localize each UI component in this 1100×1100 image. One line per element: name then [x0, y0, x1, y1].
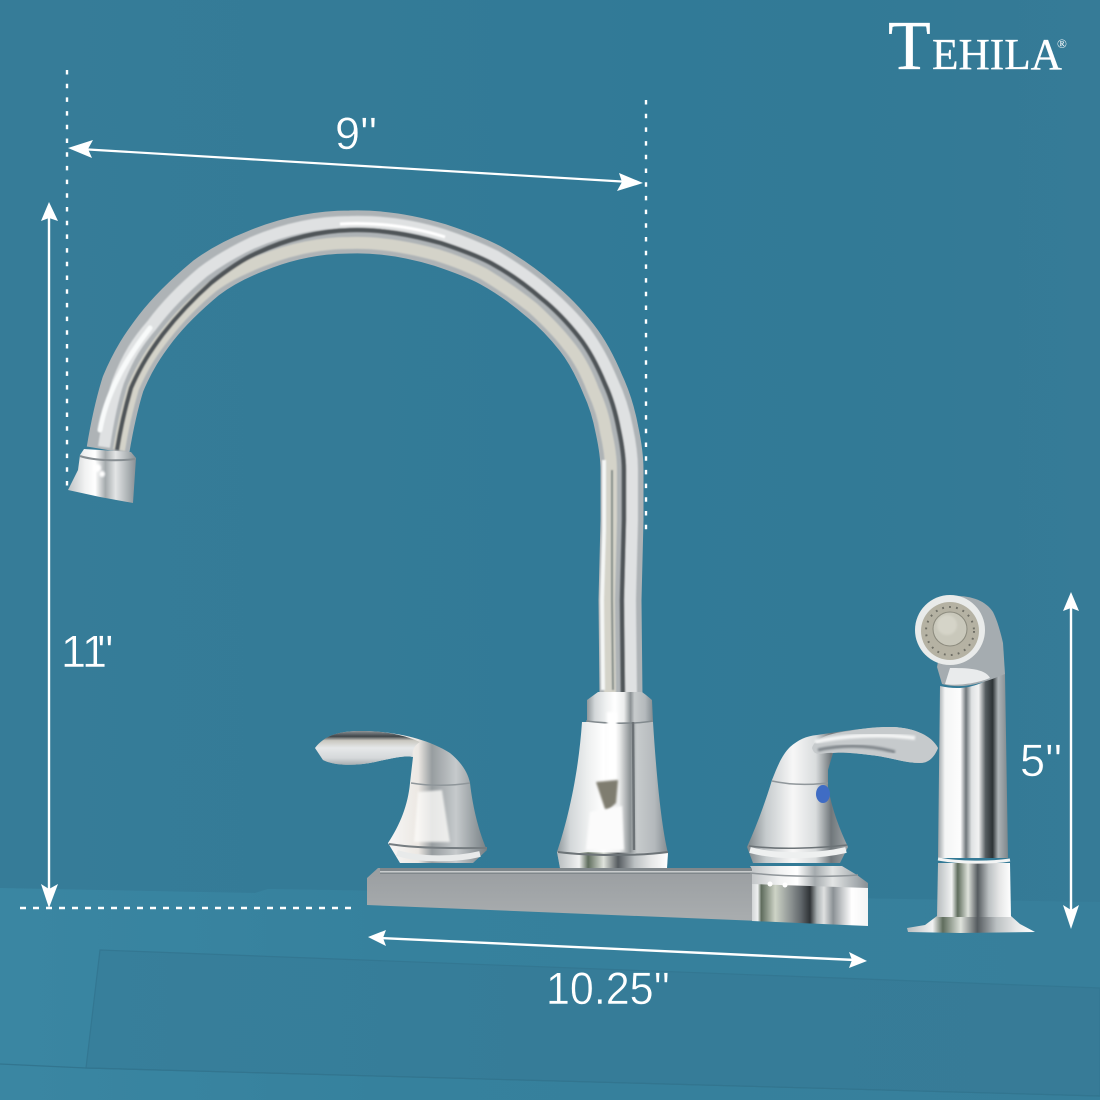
sprayer neck [937, 596, 1005, 686]
countertop [0, 888, 1100, 1100]
label: 5 inch: 5'' [1020, 735, 1062, 786]
arrow: 9 inch spout reach [68, 140, 643, 191]
side sprayer [907, 595, 1035, 933]
spray head [915, 595, 985, 665]
faucet [68, 222, 938, 926]
sprayer body [938, 672, 1008, 858]
logo: Tehila: EHILA [932, 30, 1062, 79]
blue cold indicator [816, 785, 830, 803]
label: 10.25 inch: 10.25'' [546, 963, 670, 1014]
logo: Tehila [888, 8, 1067, 85]
label: 9 inch: 9'' [335, 108, 377, 159]
counter bottom edge [0, 1064, 1100, 1096]
counter front panel [86, 950, 1100, 1096]
arrow: 10.25 inch deck width [368, 930, 867, 968]
left handle [315, 731, 487, 863]
arrow: 5 inch sprayer height [1063, 592, 1079, 929]
sprayer base flange [907, 916, 1035, 933]
logo: Tehila: T [888, 8, 931, 85]
sprayer collar [937, 863, 1011, 917]
guide: spout left edge [66, 70, 68, 488]
spout tube [100, 222, 632, 697]
logo: Tehila: ® [1057, 36, 1067, 51]
deck plate [367, 866, 868, 926]
label: 11 inch: 11'' [61, 626, 114, 677]
centre column [557, 692, 668, 868]
arrow: 11 inch height [41, 202, 58, 908]
guide: spout right edge [645, 100, 647, 532]
right handle [747, 727, 938, 863]
guide: counter level [20, 907, 358, 909]
spout nozzle [68, 449, 136, 503]
